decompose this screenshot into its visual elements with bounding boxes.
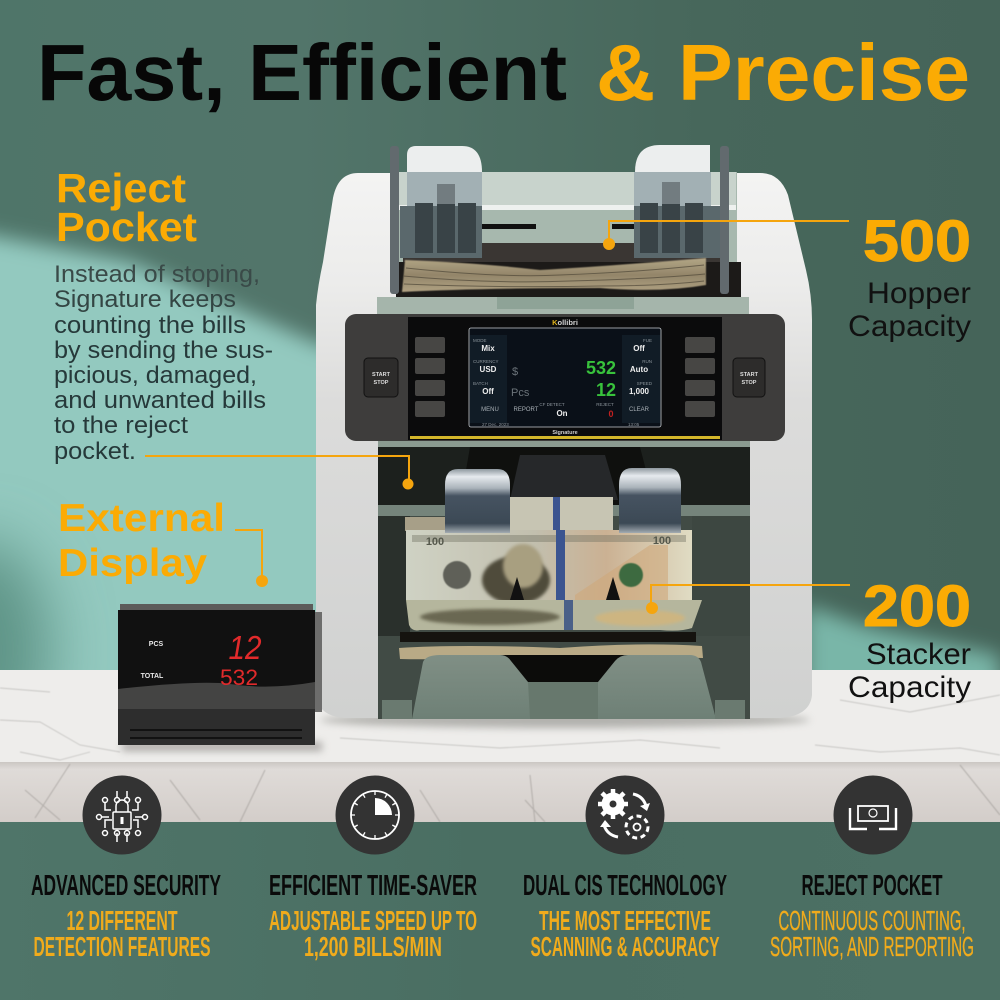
callout: external display line [235,530,268,587]
feature: advanced security: 12 DIFFERENT [66,905,178,936]
icon: gears [586,776,664,854]
stat: hopper capacity: Hopper [867,277,971,310]
screen: CF DETECT [539,402,565,407]
screen: Mix [481,344,495,353]
stat: hopper capacity [848,209,971,343]
screen: CLEAR [629,407,650,413]
screen: REJECT [596,402,614,407]
stat: stacker capacity [848,574,971,704]
feature: advanced security: DETECTION FEATURES [34,931,210,962]
control panel: Signature [552,430,578,436]
hopper [377,145,749,315]
machine body [316,173,812,718]
hundred dollar bills: 100 [426,536,444,548]
stat: hopper capacity: Capacity [848,310,971,343]
feature: advanced security: ADVANCED SECURITY [31,870,221,902]
led readout 532: 532 [220,665,258,690]
hundred dollar bills: 100 [653,535,671,547]
control panel [345,314,785,441]
callout: reject pocket line [145,456,414,490]
total label: TOTAL [141,673,164,680]
icon: circuit lock [82,776,162,854]
hopper bill stack [402,258,706,292]
feature: dual cis technology: THE MOST EFFECTIVE [539,905,711,936]
feature: efficient time-saver: 1,200 BILLS/MIN [304,931,442,962]
bottom band [0,822,1000,1000]
pcs label: PCS [149,641,164,648]
screen: 13:05 [628,422,640,427]
screen: MENU [481,407,499,413]
screen: On [556,409,568,418]
heading: reject pocket [56,165,197,250]
heading: external display: External [58,497,225,540]
callout: hopper line [603,221,849,250]
icon: timer [336,776,414,854]
screen: RUN [642,359,652,364]
screen: MODE [473,338,486,343]
screen: 0 [608,409,614,419]
stat: stacker capacity: Capacity [848,671,971,704]
screen: Off [482,387,494,396]
start stop left [364,358,398,397]
stat: stacker capacity: Stacker [866,638,971,671]
feature: dual cis technology: SCANNING & ACCURACY [530,931,720,962]
reject pocket description: pocket. [54,438,136,465]
marble shelf [0,670,1000,823]
money counter machine [316,145,812,719]
screen: Auto [630,365,648,374]
reject pocket description [54,261,273,465]
feature: advanced security [31,870,221,962]
screen: FUE [643,338,652,343]
stat: hopper capacity: 500 [863,209,971,274]
title: Fast, Efficient [37,28,567,117]
reject pocket description: Signature keeps [54,286,236,313]
screen [469,328,661,427]
heading: reject pocket: Pocket [56,204,197,250]
stacker tray [382,655,745,719]
reject pocket description: to the reject [54,412,188,439]
led readout 12: 12 [228,629,262,666]
feature: efficient time-saver [269,870,477,962]
heading: reject pocket: Reject [56,165,186,211]
title [37,28,970,117]
screen: 1,000 [629,387,650,396]
bill guides [445,468,681,533]
feature: efficient time-saver: ADJUSTABLE SPEED UP TO [269,905,477,936]
reject pocket description: picious, damaged, [54,362,257,389]
screen: $ [512,366,518,378]
screen: BATCH [473,381,488,386]
start stop left: START [372,372,391,378]
start stop right [733,358,765,397]
screen: Off [633,344,645,353]
feature: efficient time-saver: EFFICIENT TIME-SAVER [269,870,477,902]
background wall [0,0,1000,760]
screen: Pcs [511,387,530,399]
screen: REPORT [514,407,539,413]
callout: stacker line [646,585,850,614]
screen: 12 [596,380,616,400]
start stop right: START [740,372,759,378]
side buttons [415,337,715,417]
start stop right: STOP [742,380,757,386]
stat: stacker capacity: 200 [863,574,971,639]
feature: dual cis technology [523,870,727,962]
reject pocket description: and unwanted bills [54,387,266,414]
heading: external display [58,497,225,585]
icon: reject pocket cash [834,776,912,854]
start stop left: STOP [374,380,389,386]
reject pocket description: Instead of stoping, [54,261,260,288]
hundred dollar bills [399,530,703,659]
external display shadow [122,742,322,751]
screen: SPEED [637,381,653,386]
screen: 27 Dec. 2023 [482,422,509,427]
feature: reject pocket [770,870,974,962]
reject pocket description: by sending the sus- [54,337,273,364]
heading: external display: Display [58,542,207,585]
stacker cavity [378,441,750,719]
kollibri logo: Kollibri [552,318,578,327]
title: & Precise [596,28,970,117]
feature: dual cis technology: DUAL CIS TECHNOLOGY [523,870,727,902]
external display [118,604,322,745]
machine shadow [320,712,810,728]
screen: CURRENCY [473,359,499,364]
screen: USD [480,365,497,374]
reject pocket description: counting the bills [54,312,246,339]
screen: 532 [586,358,616,378]
